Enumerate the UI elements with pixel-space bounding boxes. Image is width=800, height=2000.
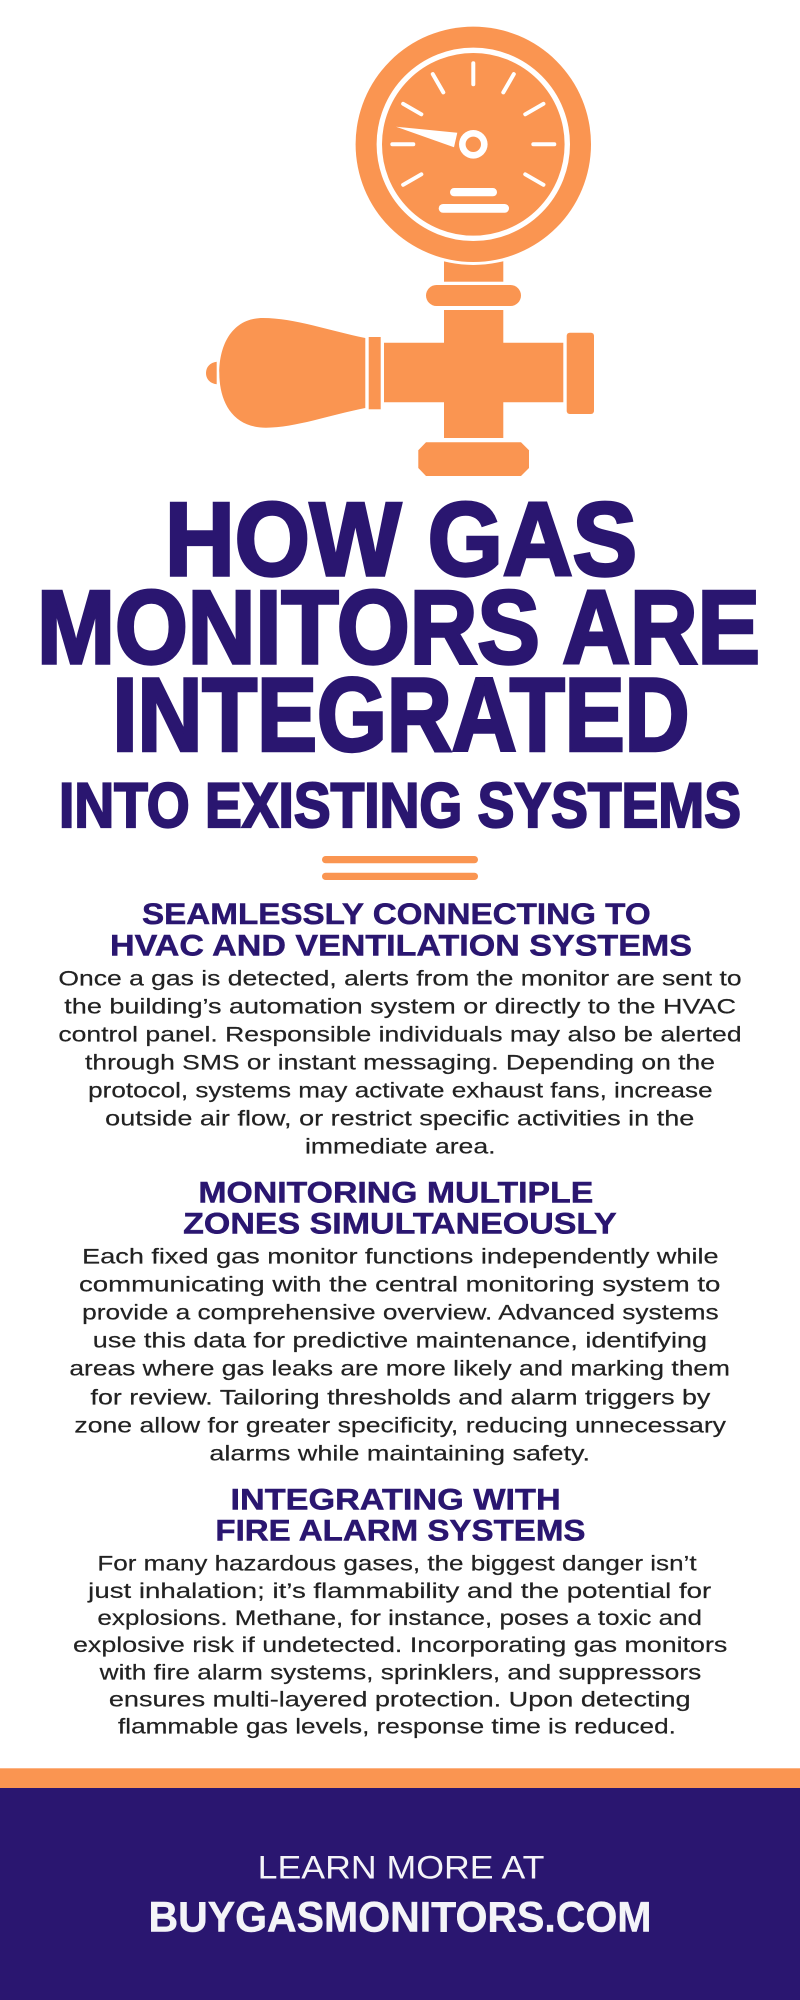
section heading [183, 1176, 617, 1240]
icon: pressure gauge on pipe fitting [206, 24, 594, 476]
footer panel [0, 1788, 800, 2000]
section body text: explosive risk if undetected. Incorporating gas monitors [73, 1633, 727, 1657]
footer website: BUYGASMONITORS.COM [148, 1894, 652, 1942]
section body text: flammable gas levels, response time is reduced. [118, 1714, 676, 1738]
section body text: use this data for predictive maintenance, identifying [93, 1329, 707, 1353]
section body text: Each fixed gas monitor functions independently while [82, 1245, 719, 1269]
section body text: immediate area. [305, 1135, 496, 1159]
section body text: with fire alarm systems, sprinklers, and suppressors [98, 1660, 701, 1684]
section body text [73, 1552, 727, 1738]
title [37, 482, 760, 774]
title line 1: HOW GAS [165, 482, 637, 598]
section body text: areas where gas leaks are more likely and marking them [69, 1357, 730, 1381]
section heading: SEAMLESSLY CONNECTING TO [142, 898, 651, 931]
section body text: explosions. Methane, for instance, poses a toxic and [97, 1606, 702, 1630]
section heading: ZONES SIMULTANEOUSLY [183, 1207, 617, 1240]
section body text: the building’s automation system or directly to the HVAC [64, 995, 736, 1019]
section body text: just inhalation; it’s flammability and the potential for [87, 1579, 711, 1603]
section heading: FIRE ALARM SYSTEMS [215, 1515, 586, 1548]
gauge dial [353, 24, 594, 265]
section body text: ensures multi-layered protection. Upon detecting [109, 1688, 691, 1712]
section body text: zone allow for greater specificity, reducing unnecessary [74, 1413, 726, 1437]
section body text: through SMS or instant messaging. Depending on the [85, 1051, 715, 1075]
section heading: INTEGRATING WITH [230, 1484, 561, 1517]
section body text: Once a gas is detected, alerts from the monitor are sent to [58, 967, 742, 991]
section body text: control panel. Responsible individuals may also be alerted [58, 1023, 742, 1047]
section body text: provide a comprehensive overview. Advanced systems [82, 1301, 719, 1325]
section heading [215, 1484, 586, 1548]
title line 3: INTEGRATED [112, 658, 690, 774]
section body text: protocol, systems may activate exhaust fans, increase [88, 1079, 713, 1103]
section: integrating with fire alarm systems [73, 1484, 727, 1738]
valve nub [206, 362, 217, 384]
section heading: MONITORING MULTIPLE [198, 1176, 593, 1209]
bottom pipe cap [418, 442, 529, 476]
section heading: HVAC AND VENTILATION SYSTEMS [110, 930, 692, 963]
valve bulb [219, 318, 365, 428]
section body text [69, 1245, 730, 1465]
section body text: For many hazardous gases, the biggest danger isn’t [97, 1552, 697, 1576]
section body text: alarms while maintaining safety. [209, 1441, 590, 1465]
section heading [110, 898, 692, 963]
section body text: outside air flow, or restrict specific activities in the [105, 1107, 694, 1131]
section body text [58, 967, 742, 1159]
right pipe cap [567, 333, 594, 414]
section body text: for review. Tailoring thresholds and alarm triggers by [90, 1385, 711, 1409]
valve band [369, 337, 381, 409]
footer label: LEARN MORE AT [258, 1849, 545, 1885]
section: seamlessly connecting [58, 898, 742, 1159]
orange band [0, 1768, 800, 1788]
pipe cross [384, 310, 563, 438]
gauge stem [444, 250, 503, 282]
gauge collar [426, 285, 521, 306]
section: monitoring multiple zones [69, 1176, 730, 1465]
section body text: communicating with the central monitoring system to [79, 1273, 720, 1297]
divider bars [322, 856, 478, 880]
